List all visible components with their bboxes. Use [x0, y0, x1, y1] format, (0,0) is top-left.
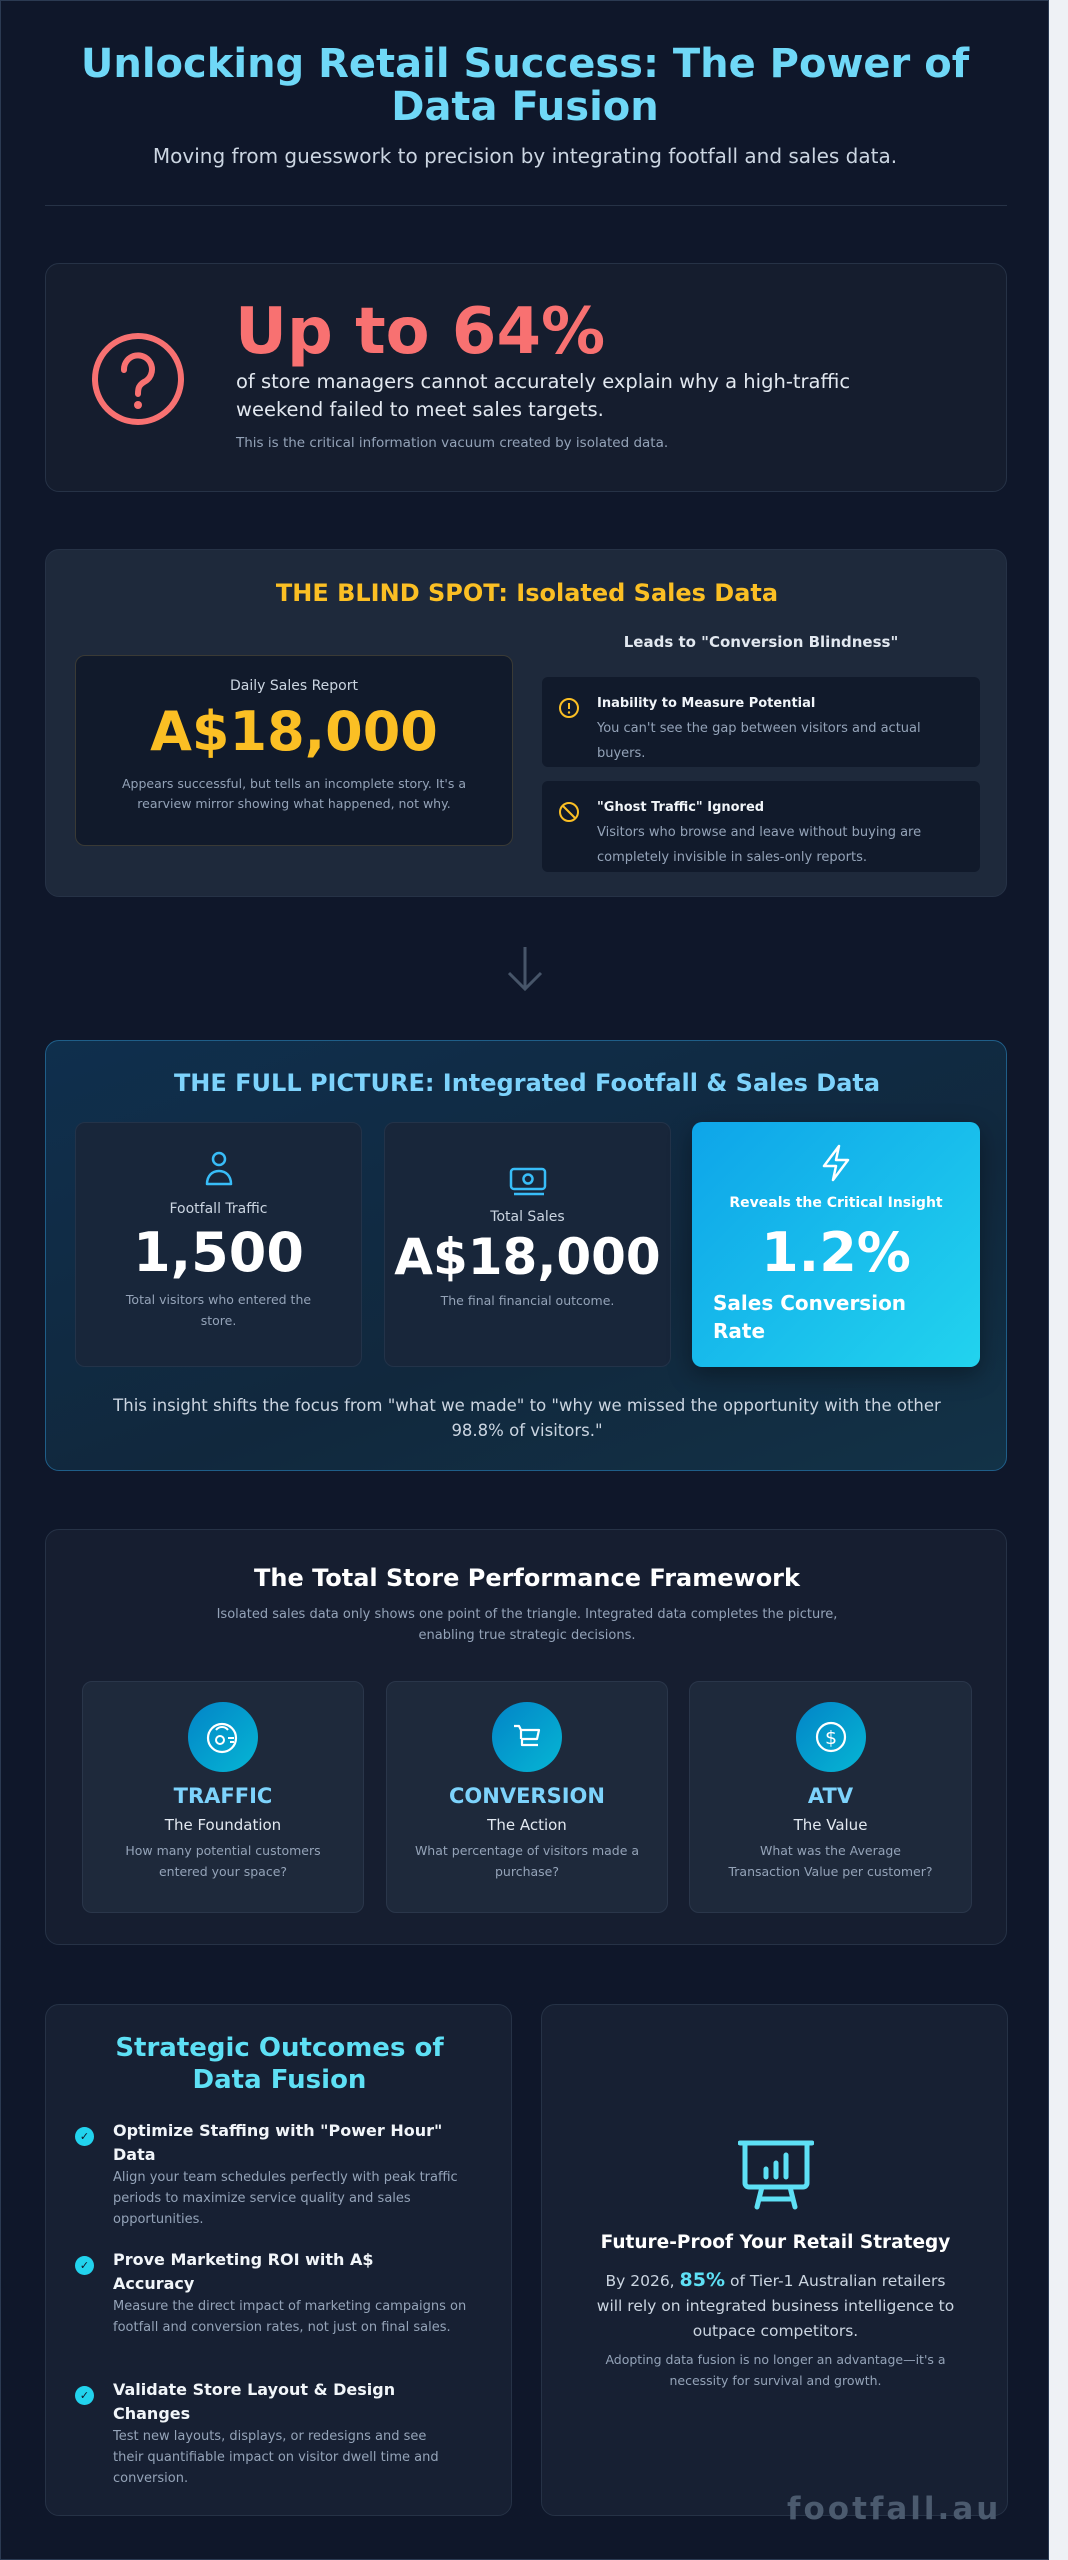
item: inability: Inability to Measure Potential	[597, 696, 815, 711]
card: atv: The Value	[794, 1816, 867, 1834]
outcome 2	[75, 2250, 466, 2335]
body: will rely on integrated business intelligence to outpace competitors.	[597, 2297, 954, 2340]
outcome 3: ✓	[80, 2389, 89, 2402]
icon: presentation chart	[738, 2140, 814, 2210]
outcome 3: Test new layouts, displays, or redesigns and see their quantifiable impact on visitor dwell time and conversion.	[113, 2429, 439, 2486]
outcome 2: Measure the direct impact of marketing campaigns on footfall and conversion rates, not just on final sales.	[113, 2299, 466, 2335]
item: inability	[542, 677, 980, 767]
subheading: Leads to "Conversion Blindness"	[624, 633, 898, 651]
title: Data Fusion	[391, 84, 659, 130]
card: total sales: A$18,000	[394, 1228, 661, 1286]
card: conversion insight: 1.2%	[761, 1221, 911, 1284]
card: conversion	[386, 1681, 668, 1913]
item: ghost traffic: "Ghost Traffic" Ignored	[597, 800, 764, 815]
card: conversion: CONVERSION	[449, 1784, 605, 1808]
card: daily sales: A$18,000	[150, 700, 438, 763]
outcome 3	[75, 2380, 439, 2486]
card: traffic: How many potential customers entered your space?	[125, 1843, 321, 1879]
subtext: Isolated sales data only shows one point of the triangle. Integrated data completes the picture, enabling true strategic decisions.	[217, 1607, 837, 1643]
panel: framework	[45, 1529, 1007, 1945]
card: atv: ATV	[808, 1784, 853, 1808]
card: daily sales: Daily Sales Report	[230, 678, 358, 694]
heading: Strategic Outcomes of	[115, 2033, 444, 2063]
icon: question	[92, 333, 184, 425]
icon: cart	[492, 1702, 562, 1772]
card: conversion insight: Sales Conversion Rate	[713, 1291, 906, 1343]
card: atv: What was the Average	[760, 1843, 901, 1858]
card: traffic: The Foundation	[165, 1816, 281, 1834]
heading: Future-Proof Your Retail Strategy	[601, 2232, 950, 2253]
panel: future-proof	[541, 2004, 1008, 2516]
item: ghost traffic	[542, 781, 980, 872]
body	[597, 2269, 954, 2340]
card: daily sales: Appears successful, but tells an incomplete story. It's a rearview mirror showing what happened, not why.	[122, 776, 466, 811]
outcome 1: Optimize Staffing with "Power Hour" Data	[113, 2121, 442, 2164]
card: footfall	[75, 1122, 362, 1367]
heading: The Total Store Performance Framework	[254, 1564, 800, 1592]
outcome 2: ✓	[80, 2259, 89, 2272]
note: This is the critical information vacuum created by isolated data.	[236, 435, 668, 451]
card: conversion insight: Reveals the Critical Insight	[729, 1195, 943, 1211]
panel: strategic outcomes	[45, 2004, 512, 2516]
card: total sales: The final financial outcome.	[441, 1293, 614, 1308]
note: Adopting data fusion is no longer an advantage—it's a necessity for survival and growth.	[605, 2352, 946, 2388]
icon: dollar: $	[824, 1727, 837, 1749]
panel: blind spot	[45, 549, 1007, 897]
card: conversion: The Action	[487, 1816, 567, 1834]
heading: Data Fusion	[193, 2065, 366, 2095]
panel: full picture	[45, 1040, 1007, 1471]
card: atv	[689, 1681, 972, 1913]
subtitle: Moving from guesswork to precision by integrating footfall and sales data.	[153, 144, 897, 168]
card: conversion: What percentage of visitors made a purchase?	[415, 1843, 639, 1879]
title	[81, 41, 970, 130]
icon: dollar	[796, 1702, 866, 1772]
watermark: footfall.au	[787, 2491, 1001, 2527]
title: Unlocking Retail Success: The Power of	[81, 41, 969, 87]
body: By 2026, 85% of Tier-1 Australian retailers	[606, 2269, 945, 2291]
outcome 1	[75, 2121, 458, 2227]
item: ghost traffic: Visitors who browse and leave without buying are completely invisible in sales-only reports.	[597, 825, 921, 865]
insight text: This insight shifts the focus from "what we made" to "why we missed the opportunity with the other 98.8% of visitors."	[113, 1396, 941, 1440]
outcome 3: Validate Store Layout & Design Changes	[113, 2380, 395, 2423]
heading: THE FULL PICTURE: Integrated Footfall & Sales Data	[174, 1069, 880, 1097]
heading	[115, 2033, 444, 2095]
outcome 1: Align your team schedules perfectly with peak traffic periods to maximize service quality and sales opportunities.	[113, 2170, 458, 2227]
card: atv: Transaction Value per customer?	[728, 1864, 933, 1879]
stat text: of store managers cannot accurately explain why a high-traffic weekend failed to meet sales targets.	[236, 370, 850, 421]
card: conversion insight	[692, 1122, 980, 1367]
card: total sales	[384, 1122, 671, 1367]
icon: traffic	[188, 1702, 258, 1772]
card: traffic	[82, 1681, 364, 1913]
heading: THE BLIND SPOT: Isolated Sales Data	[276, 579, 778, 607]
stat: Up to 64%	[235, 295, 605, 369]
item: inability: You can't see the gap between visitors and actual buyers.	[597, 721, 921, 761]
outcome 2: Prove Marketing ROI with A$ Accuracy	[113, 2250, 374, 2293]
card: footfall: Footfall Traffic	[170, 1201, 267, 1217]
card: footfall: Total visitors who entered the store.	[126, 1292, 311, 1328]
panel: 64% stat	[45, 263, 1007, 492]
outcome 1: ✓	[80, 2130, 89, 2143]
card: daily sales	[75, 655, 513, 846]
card: footfall: 1,500	[133, 1221, 304, 1284]
card: traffic: TRAFFIC	[174, 1784, 272, 1808]
card: total sales: Total Sales	[490, 1209, 565, 1225]
arrow	[508, 947, 542, 991]
